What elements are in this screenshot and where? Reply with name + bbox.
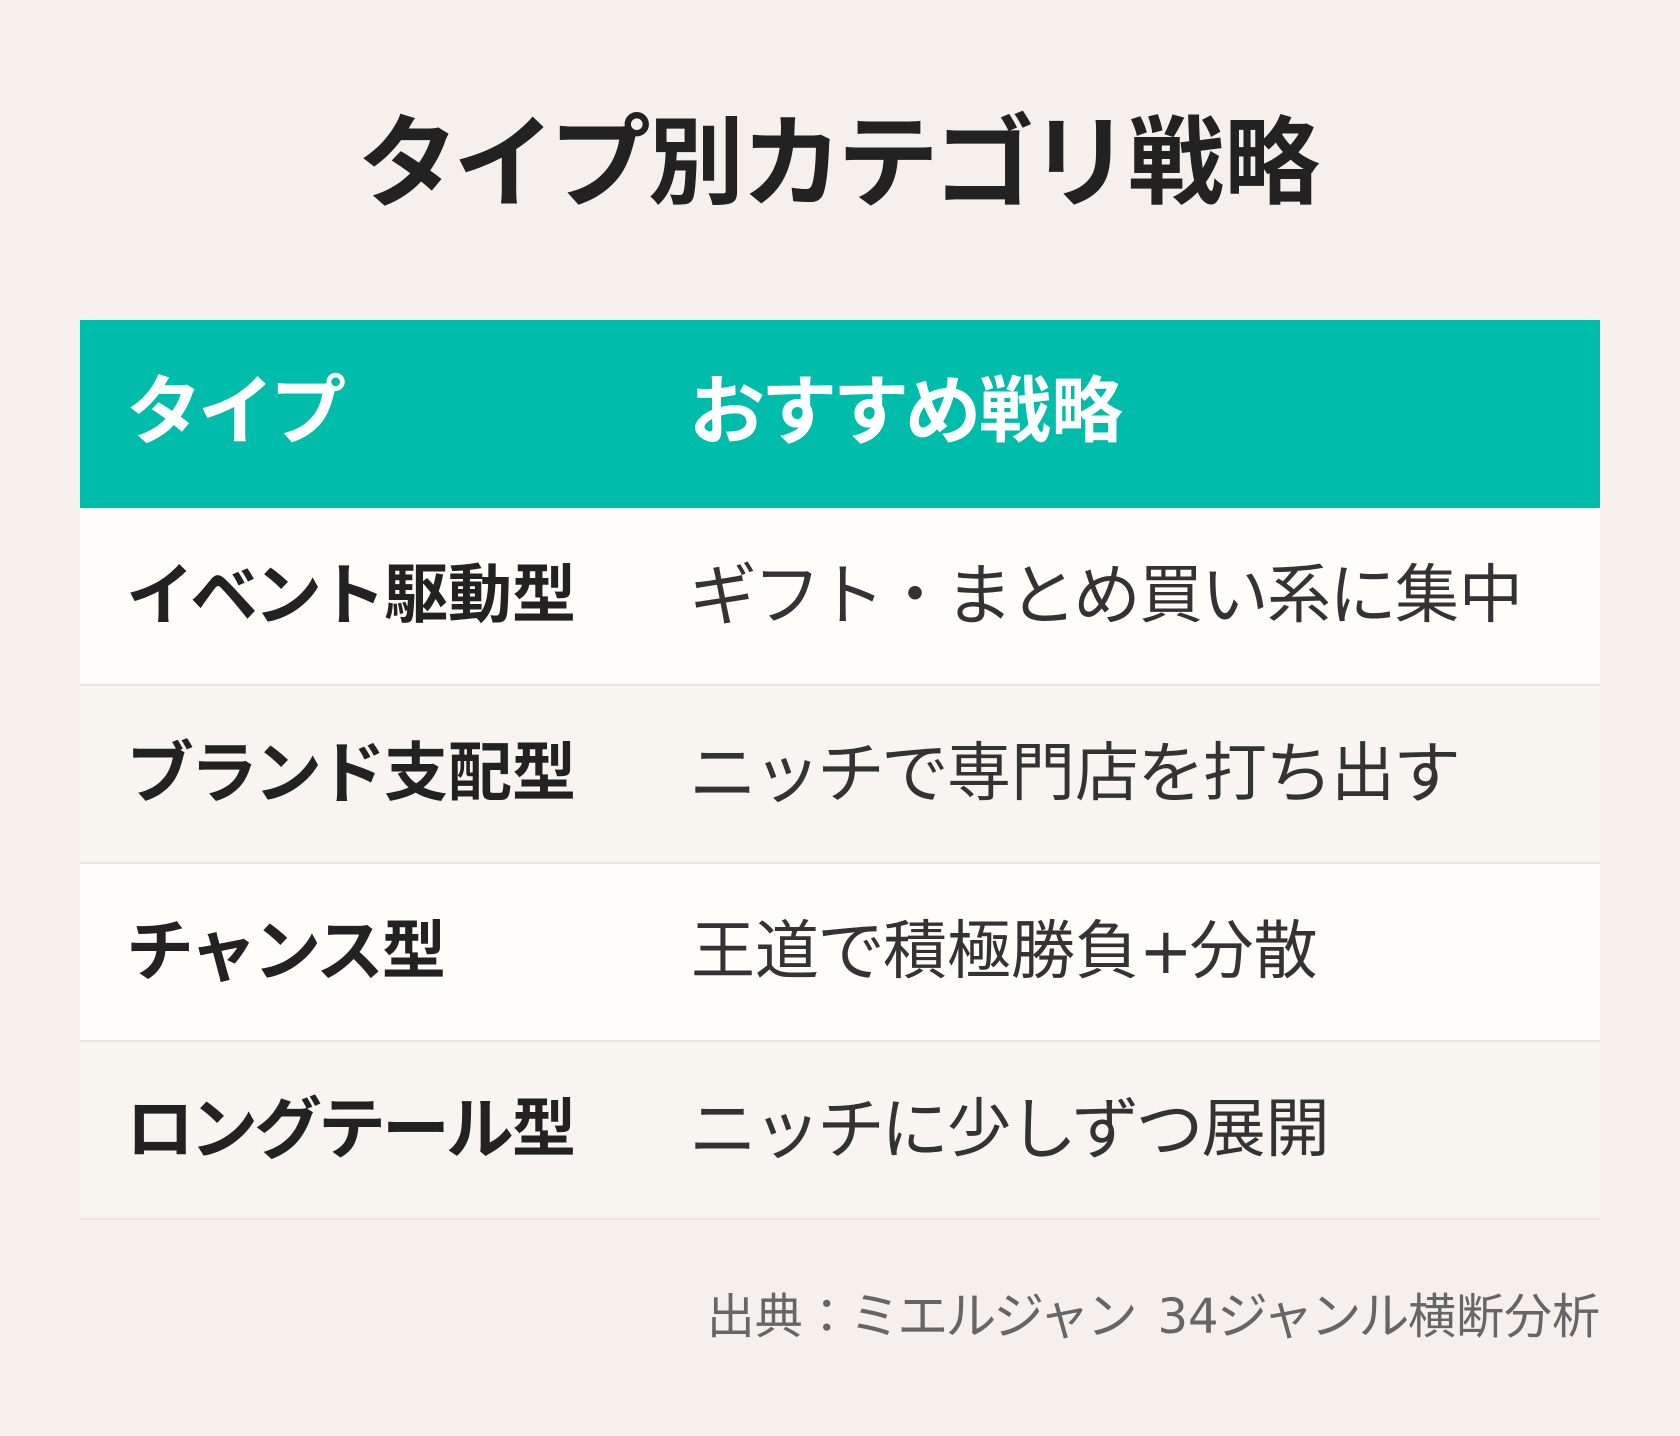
row label: チャンス型: [126, 912, 446, 991]
table header: [80, 320, 1600, 508]
row label: ロングテール型: [126, 1090, 576, 1169]
source note: 出典：ミエルジャン 34ジャンル横断分析: [707, 1287, 1600, 1346]
title: タイプ別カテゴリ戦略: [357, 105, 1320, 223]
row label: ブランド支配型: [126, 734, 576, 813]
row strategy: 王道で積極勝負+分散: [691, 912, 1318, 991]
header: recommended strategy: おすすめ戦略: [689, 367, 1123, 456]
row label: イベント駆動型: [126, 556, 576, 635]
row strategy: ニッチで専門店を打ち出す: [689, 734, 1457, 813]
row strategy: ギフト・まとめ買い系に集中: [689, 556, 1523, 635]
table: type strategy: [80, 320, 1600, 1220]
row: chance: [80, 864, 1600, 1042]
row: event driven: [80, 508, 1600, 686]
row: long tail: [80, 1042, 1600, 1220]
row strategy: ニッチに少しずつ展開: [689, 1090, 1330, 1169]
header: type: タイプ: [126, 367, 342, 456]
row: brand dominated: [80, 686, 1600, 864]
